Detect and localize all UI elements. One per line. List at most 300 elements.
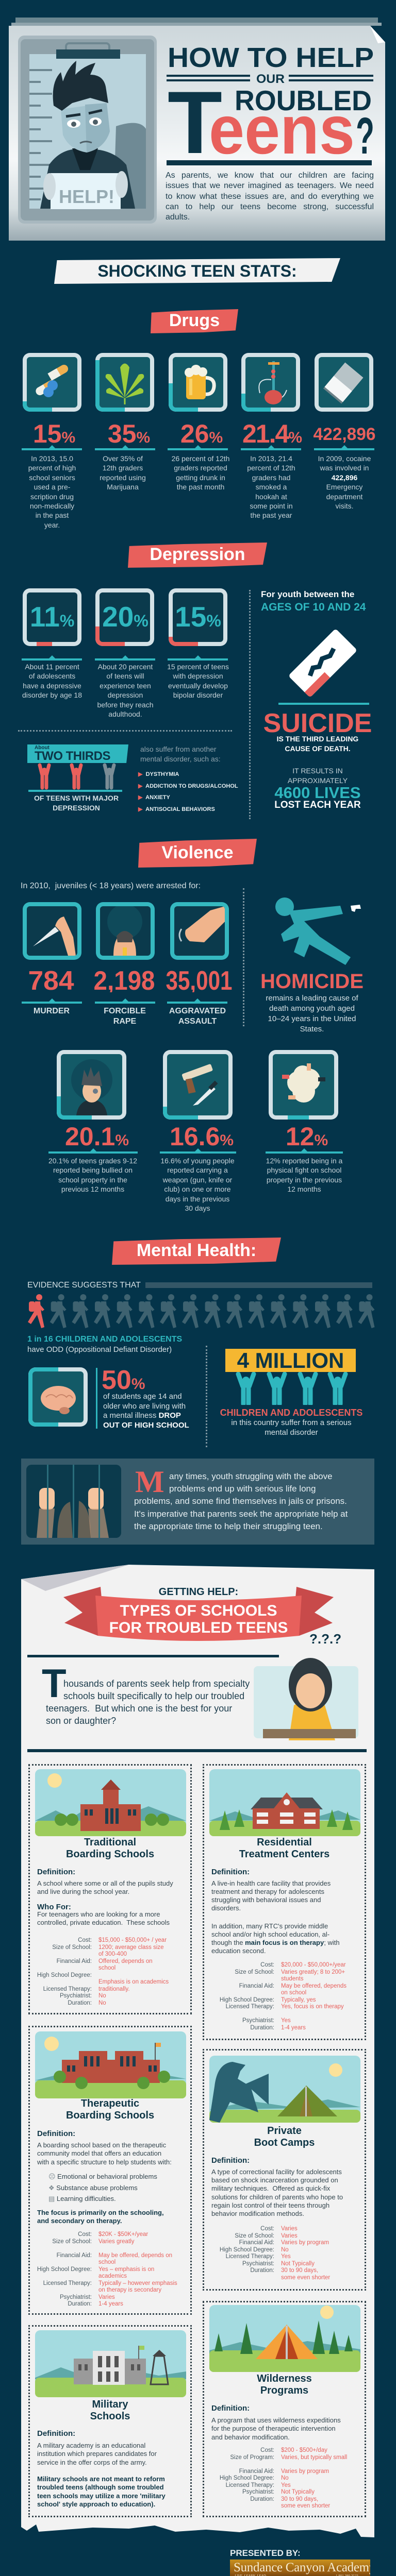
depression descriptions: About 20 percent (98, 663, 153, 671)
title: eens (209, 92, 355, 168)
card: therapeutic boarding schools: Psychiatrist: (60, 2294, 92, 2300)
depression underlines (22, 655, 228, 660)
panel: jail callout: any times, youth struggling with the above (169, 1471, 333, 1481)
illustration: boarding school (35, 1769, 186, 1836)
callout: suicide: IS THE THIRD LEADING (277, 735, 358, 743)
drug stat descriptions: 422,896 (332, 473, 357, 482)
intro paragraph: can to help our teens become strong, successful (166, 202, 374, 211)
card: traditional boarding schools: controlled, private education. These schools (37, 1919, 170, 1926)
heading: shocking teen stats (54, 258, 340, 284)
card: military schools: teen schools may utilize a more 'military (37, 2492, 166, 2500)
depression descriptions: experience teen (100, 682, 151, 690)
list: other disorders: ▶ DYSTHYMIA (138, 771, 179, 777)
card: residential treatment centers: Definition: (211, 1868, 250, 1876)
card: residential treatment centers: Yes, focus is on therapy (281, 2004, 344, 2010)
card: traditional boarding schools: and live during the school year. (37, 1888, 129, 1895)
mugshot illustration (18, 36, 157, 224)
drug stat descriptions: graders reported (174, 464, 227, 472)
card: traditional boarding schools: Traditional (84, 1837, 136, 1848)
card: residential treatment centers: treatment and therapy for adolescents (211, 1888, 324, 1895)
card: wilderness programs: Programs (260, 2385, 308, 2396)
card: therapeutic boarding schools: Size of School: (52, 2238, 92, 2244)
card: wilderness programs: A program that uses wilderness expeditions (211, 2416, 341, 2424)
card: wilderness programs: some even shorter (281, 2503, 330, 2509)
callout: suicide (261, 589, 372, 810)
card: traditional boarding schools: Financial Aid: (57, 1958, 92, 1964)
card: private boot camps: Varies by program (281, 2240, 329, 2246)
depression descriptions (22, 663, 229, 718)
school violence underlines and descriptions: 30 days (185, 1204, 210, 1212)
card: residential treatment centers: May be offered, depends (281, 1982, 346, 1989)
title: ROUBLED (235, 84, 372, 116)
list: other disorders: also suffer from another (140, 745, 217, 753)
icon box: beer (169, 353, 227, 412)
callout: suicide: 4600 LIVES (274, 784, 361, 802)
card: therapeutic boarding schools: The focus is primarily on the schooling, (37, 2209, 164, 2216)
drug stat descriptions: In 2009, cocaine (318, 454, 371, 463)
card: therapeutic boarding schools: community model that offers an education (37, 2149, 161, 2157)
card: private boot camps (203, 2049, 366, 2291)
card: private boot camps: Private (267, 2125, 302, 2137)
card: traditional boarding schools: of 300-400 (98, 1951, 127, 1957)
card: private boot camps: Cost: (260, 2226, 274, 2232)
card: therapeutic boarding schools: Therapeutic (81, 2098, 139, 2109)
text: intro thousands of parents: teenagers. But which one is the best for your (46, 1703, 232, 1714)
card: residential treatment centers: Treatment Centers (239, 1849, 329, 1860)
drug stat descriptions: school seniors (29, 473, 75, 482)
card: therapeutic boarding schools: academics (98, 2273, 127, 2279)
school violence underlines and descriptions: property in the previous (267, 1176, 342, 1184)
card: residential treatment centers: In addition, many RTC's provide middle (211, 1922, 328, 1930)
ribbon heading: types of schools: GETTING HELP: (159, 1586, 238, 1598)
card: traditional boarding schools: Who For: (37, 1903, 71, 1911)
card: traditional boarding schools: No (98, 1993, 106, 1999)
heading: evidence suggests (27, 1281, 372, 1290)
callout: suicide: AGES OF 10 AND 24 (261, 601, 366, 613)
callout: two thirds: About (35, 745, 50, 751)
drug stat descriptions: percent of high (28, 464, 76, 472)
drug stat descriptions: reported using (100, 473, 146, 482)
drug stat descriptions: percent of 12th (247, 464, 295, 472)
card: wilderness programs: Licensed Therapy: (226, 2482, 274, 2488)
drug stat descriptions: the past year (251, 511, 292, 519)
card: residential treatment centers: Size of School: (235, 1969, 274, 1975)
banner: depression (128, 543, 267, 568)
card: private boot camps: 30 to 90 days, (281, 2267, 318, 2274)
icon: four figures (236, 1372, 348, 1405)
callout: suicide: LOST EACH YEAR (274, 800, 361, 810)
card: wilderness programs: Definition: (211, 2404, 250, 2413)
drug stat descriptions: was involved in (320, 464, 369, 472)
card: private boot camps: High School Degree: (220, 2246, 274, 2252)
depression stat boxes: 11% (30, 601, 74, 633)
card: traditional boarding schools: Boarding Schools (66, 1849, 154, 1860)
dotted divider violence (243, 888, 244, 1026)
card: therapeutic boarding schools: Cost: (78, 2231, 92, 2238)
banner: violence (138, 839, 257, 868)
heading: evidence suggests: EVIDENCE SUGGESTS THAT (27, 1281, 141, 1290)
school violence underlines and descriptions: physical fight on school (267, 1166, 341, 1174)
card: therapeutic boarding schools: ❖ Substance abuse problems (48, 2183, 138, 2192)
card: wilderness programs: 30 to 90 days, (281, 2496, 318, 2502)
drug stat descriptions: smoked a (256, 483, 287, 491)
drug stat descriptions: In 2013, 21.4 (250, 454, 292, 463)
stat: 4 million: CHILDREN AND ADOLESCENTS (220, 1408, 362, 1418)
list: other disorders: mental disorder, such as: (140, 754, 221, 762)
drug stat numbers: 21.4% (242, 419, 302, 448)
title: ? (356, 107, 374, 165)
card: residential treatment centers: Varies greatly; 8 to 200+ (281, 1969, 345, 1975)
intro paragraph (166, 171, 374, 222)
card: military schools: institution which prepares candidates for (37, 2450, 157, 2458)
card: traditional boarding schools: For teenagers who are looking for a more (37, 1910, 160, 1918)
stat: 50% dropout: older who are living with (103, 1401, 186, 1411)
school violence underlines and descriptions: 16.6% of young people (160, 1157, 235, 1165)
card: therapeutic boarding schools: Varies (98, 2294, 115, 2300)
school violence underlines and descriptions: reported being bullied on (53, 1166, 133, 1174)
card: traditional boarding schools: Cost: (78, 1937, 92, 1943)
drug stat descriptions: 12th graders (103, 464, 143, 472)
school violence underlines and descriptions: 12 months (287, 1185, 321, 1193)
banner: mental health: Mental Health: (137, 1241, 256, 1260)
card: wilderness programs: Wilderness (257, 2373, 312, 2384)
card: military schools: Definition: (37, 2429, 75, 2438)
card: military schools: school' style approach to education). (37, 2500, 155, 2508)
panel: jail callout: M (135, 1465, 164, 1499)
violence underlines and labels: RAPE (113, 1017, 136, 1026)
card: therapeutic boarding schools: on therapy is secondary (98, 2287, 161, 2293)
callout: homicide: 10–24 years in the United (268, 1014, 356, 1023)
depression descriptions: of adolescents (29, 672, 75, 680)
panel: types of schools paper (21, 1565, 374, 2537)
stat: 50% dropout: a mental illness DROP (103, 1411, 181, 1420)
card: therapeutic boarding schools: Licensed Therapy: (43, 2280, 92, 2286)
card: therapeutic boarding schools: 1-4 years (98, 2301, 123, 2307)
callout: suicide: CAUSE OF DEATH. (285, 744, 351, 753)
school violence underlines and descriptions: weapon (gun, knife or (163, 1176, 232, 1184)
icon: hands on bars (26, 1465, 121, 1538)
list: other disorders: ▶ ANTISOCIAL BEHAVIORS (138, 806, 215, 812)
card: residential treatment centers: school and/or high school education, al- (211, 1930, 329, 1938)
callout: suicide: For youth between the (261, 589, 354, 599)
school violence underlines and descriptions: days in the previous (166, 1195, 229, 1203)
school violence underlines and descriptions: school property in the (58, 1176, 127, 1184)
card: residential treatment centers: education second. (211, 1947, 266, 1955)
drug stat descriptions: in the past (36, 511, 69, 519)
card: traditional boarding schools: school (98, 1965, 116, 1971)
text: ODD stat (27, 1335, 182, 1354)
school violence underlines and descriptions: club) on one or more (164, 1185, 231, 1193)
banner: violence: Violence (161, 843, 234, 862)
card: residential treatment centers: students (281, 1976, 303, 1982)
callout: two thirds (27, 744, 128, 812)
card: traditional boarding schools: Definition: (37, 1868, 75, 1876)
text: intro thousands of parents: schools built specifically to help our troubled (63, 1691, 244, 1701)
drug stat descriptions: hookah at (255, 493, 287, 501)
card: residential treatment centers: Yes (281, 2018, 291, 2024)
intro paragraph: to know what these issues are, and do everything we (166, 192, 374, 201)
mugshot illustration: HELP! (59, 186, 114, 207)
presented by logo: PRESENTED BY: (230, 2548, 301, 2558)
card: therapeutic boarding schools: Duration: (68, 2301, 92, 2307)
card: therapeutic boarding schools (28, 2026, 192, 2315)
card: traditional boarding schools: Size of School: (52, 1944, 92, 1951)
drug stat descriptions: getting drunk in (176, 473, 225, 482)
card: private boot camps: Varies (281, 2226, 298, 2232)
card: therapeutic boarding schools: school (98, 2259, 116, 2265)
card: military schools: Military (92, 2399, 128, 2410)
depression descriptions: disorder by age 18 (22, 691, 82, 699)
card: private boot camps: military techniques. Offered as quick-fix (211, 2184, 330, 2192)
card: private boot camps: Financial Aid: (239, 2240, 274, 2246)
depression stat boxes: 15% (175, 601, 221, 633)
card: residential treatment centers: Typically, yes (281, 1997, 316, 2003)
card: wilderness programs: for the purpose of therapeutic intervention (211, 2425, 336, 2432)
violence numbers (28, 966, 232, 992)
illustration: treatment center (209, 1769, 360, 1836)
drug stat descriptions: scription drug (30, 493, 74, 501)
drug stat descriptions: In 2013, 15.0 (31, 454, 73, 463)
depression descriptions: of teens will (106, 672, 144, 680)
panel: jail callout: It's imperative that parents seek the appropriate help at (134, 1509, 348, 1519)
drug stat numbers: 422,896 (314, 425, 375, 444)
school violence underlines and descriptions: reported carrying a (167, 1166, 228, 1174)
banner: depression: Depression (150, 545, 245, 564)
card: military schools: Schools (90, 2411, 130, 2422)
chart: 1 in 16 walking figures (28, 1294, 374, 1328)
card: traditional boarding schools: Psychiatrist: (60, 1993, 92, 1999)
school violence underlines and descriptions: 12% reported being in a (266, 1157, 342, 1165)
card: wilderness programs: Psychiatrist: (242, 2489, 274, 2495)
card: residential treatment centers: on school (281, 1990, 306, 1996)
icon: razor blade (278, 630, 369, 705)
panel: jail callout: problems, and some find themselves in jails or prisons. (134, 1496, 347, 1506)
title: OUR (256, 72, 285, 86)
panel: jail callout: the appropriate time to help their struggling teen. (134, 1521, 323, 1531)
card: traditional boarding schools: Offered, depends on (98, 1958, 153, 1964)
card: traditional boarding schools: $15,000 - $50,000+ / year (98, 1937, 167, 1943)
list: other disorders: ▶ ANXIETY (138, 794, 170, 801)
depression descriptions: bipolar disorder (173, 691, 223, 699)
callout: suicide: IT RESULTS IN (292, 767, 343, 775)
card: residential treatment centers (203, 1764, 366, 2040)
card: traditional boarding schools (28, 1764, 192, 2014)
drug stat numbers: 35% (108, 419, 150, 448)
card: military schools: service in the offer corps of the army. (37, 2459, 147, 2466)
divider line (27, 1749, 367, 1752)
depression descriptions: adulthood. (108, 710, 142, 718)
text: ODD stat: have ODD (Oppositional Defiant Disorder) (27, 1345, 172, 1354)
card: private boot camps: regain lost control of their teens through (211, 2201, 329, 2209)
card: residential treatment centers: High School Degree: (220, 1997, 274, 2003)
illustration: worried mother (254, 1631, 358, 1740)
card: private boot camps: Not Typically (281, 2261, 315, 2267)
header paper panel (9, 18, 385, 241)
card: wilderness programs: No (281, 2475, 289, 2481)
drug stat descriptions: some point in (250, 502, 293, 510)
card: traditional boarding schools: Licensed Therapy: (43, 1986, 92, 1992)
violence underlines and labels: FORCIBLE (104, 1007, 146, 1015)
callout: two thirds: TWO THIRDS (35, 749, 110, 763)
school violence underlines and descriptions: 20.1% of teens grades 9-12 (48, 1157, 137, 1165)
icon: three figures (38, 764, 116, 789)
ribbon heading: types of schools (63, 1586, 334, 1641)
card: private boot camps: Duration: (250, 2267, 274, 2274)
stat: 50% dropout: 50% (102, 1365, 145, 1395)
card: private boot camps: behavior modification methods. (211, 2210, 304, 2217)
drug stat descriptions: visits. (335, 502, 354, 510)
card: military schools: troubled teens (although some troubled (37, 2483, 164, 2491)
card: traditional boarding schools: 1200; average class size (98, 1944, 164, 1951)
card: therapeutic boarding schools: ▤ Learning difficulties. (48, 2195, 116, 2202)
card: therapeutic boarding schools: Definition: (37, 2129, 75, 2138)
card: wilderness programs: Yes (281, 2482, 291, 2488)
violence underlines and labels: AGGRAVATED (169, 1007, 226, 1015)
drug stat descriptions: Marijuana (107, 483, 139, 491)
stat: 50% dropout: of students age 14 and (103, 1392, 182, 1401)
card: therapeutic boarding schools: Financial Aid: (57, 2252, 92, 2259)
panel: jail callout (21, 1459, 374, 1545)
card: wilderness programs: Cost: (260, 2447, 274, 2453)
card: private boot camps: No (281, 2246, 289, 2252)
banner: mental health (112, 1238, 281, 1265)
card: private boot camps: Boot Camps (254, 2137, 315, 2148)
card: residential treatment centers: A live-in health care facility that provides (211, 1879, 331, 1887)
depression descriptions: have a depressive (23, 682, 81, 690)
title (167, 42, 374, 172)
card: wilderness programs: Duration: (250, 2496, 274, 2502)
card: private boot camps: Varies (281, 2233, 298, 2239)
text: arrests intro: In 2010, juveniles (< 18 years) were arrested for: (21, 882, 201, 890)
card: residential treatment centers: struggling with behavioral issues and (211, 1896, 321, 1904)
violence underlines and labels: MURDER (34, 1007, 70, 1015)
card: private boot camps: Definition: (211, 2156, 250, 2165)
intro paragraph: adults. (166, 213, 190, 222)
card: residential treatment centers: Cost: (260, 1962, 274, 1968)
callout: homicide (260, 897, 364, 1033)
card: traditional boarding schools: High School Degree: (37, 1972, 92, 1978)
card: military schools: Military schools are not meant to reform (37, 2475, 165, 2483)
violence underlines and labels (22, 998, 227, 1026)
icon box: marijuana (95, 353, 154, 412)
depression descriptions: eventually develop (168, 682, 228, 690)
card: wilderness programs: Varies by program (281, 2468, 329, 2474)
depression descriptions: before they reach (97, 701, 153, 709)
card: private boot camps: based on shock incarceration grounded on (211, 2176, 338, 2184)
list: other disorders (138, 745, 238, 812)
stat: 4 million (220, 1348, 362, 1437)
card: military schools (28, 2325, 192, 2517)
card: residential treatment centers: though the main focus is on therapy; with (211, 1939, 340, 1946)
drug stat descriptions: year. (44, 521, 60, 529)
depression descriptions: 15 percent of teens (167, 663, 229, 671)
card: military schools: A military academy is an educational (37, 2442, 145, 2449)
ribbon heading: types of schools: TYPES OF SCHOOLS (120, 1602, 277, 1619)
illustration: boot camp (209, 2056, 360, 2123)
card: therapeutic boarding schools: $20K - $50K+/year (98, 2231, 148, 2238)
drug stat descriptions: 26 percent of 12th (172, 454, 229, 463)
drug stat numbers: 15% (33, 419, 75, 448)
card: wilderness programs: Size of Program: (230, 2454, 274, 2461)
card: therapeutic boarding schools: Typically – however emphasis (98, 2280, 177, 2286)
icon box: pills (23, 353, 81, 412)
card: private boot camps: Psychiatrist: (242, 2261, 274, 2267)
callout: homicide: States. (300, 1025, 324, 1033)
school violence underlines and descriptions (48, 1148, 343, 1212)
callout: suicide: APPROXIMATELY (288, 776, 348, 785)
card: therapeutic boarding schools: A boarding school based on the therapeutic (37, 2141, 166, 2149)
drug stat descriptions: Over 35% of (103, 454, 143, 463)
drug stat descriptions: used a pre- (34, 483, 70, 491)
callout: two thirds: OF TEENS WITH MAJOR (34, 794, 119, 802)
stat: 50% dropout (28, 1365, 189, 1429)
card: therapeutic boarding schools: Varies greatly (98, 2238, 134, 2244)
drug stat descriptions: the past month (177, 483, 224, 491)
title: HOW TO HELP (168, 42, 374, 73)
card: therapeutic boarding schools: ☹ Emotional or behavioral problems (48, 2173, 157, 2180)
callout: two thirds: DEPRESSION (53, 804, 100, 812)
illustration: worried mother: ?.?.? (309, 1631, 341, 1647)
card: private boot camps: Yes (281, 2253, 291, 2260)
list: other disorders: ▶ ADDICTION TO DRUGS/ALCOHOL (138, 783, 238, 789)
depression stat boxes (23, 588, 227, 646)
card: wilderness programs: High School Degree: (220, 2475, 274, 2481)
stat: 4 million: mental disorder (265, 1428, 318, 1437)
card: wilderness programs (203, 2301, 366, 2517)
card: therapeutic boarding schools: May be offered, depends on (98, 2252, 172, 2259)
card: wilderness programs: $200 - $500+/day (281, 2447, 327, 2453)
card: therapeutic boarding schools: and secondary on therapy. (37, 2217, 122, 2225)
card: residential treatment centers: disorders. (211, 1904, 241, 1912)
drug stat descriptions: department (326, 493, 362, 501)
depression descriptions: About 11 percent (25, 663, 79, 671)
card: therapeutic boarding schools: with a specific structure to help students with: (37, 2158, 172, 2166)
depression descriptions: depression (108, 691, 143, 699)
card: traditional boarding schools: A school where some or all of the pupils study (37, 1879, 173, 1887)
drug stat descriptions (28, 454, 371, 529)
card: wilderness programs: Not Typically (281, 2489, 315, 2495)
card: private boot camps: some even shorter (281, 2274, 330, 2280)
callout: homicide: remains a leading cause of (266, 994, 358, 1003)
card: residential treatment centers: Financial Aid: (239, 1982, 274, 1989)
icon box: hookah (241, 353, 300, 412)
banner: drugs: Drugs (169, 311, 220, 330)
stat: 4 million: 4 MILLION (237, 1348, 344, 1372)
title: T (168, 73, 222, 172)
intro paragraph: As parents, we know that our children are facing (166, 171, 374, 180)
presented by logo (230, 2548, 370, 2576)
school violence numbers (65, 1123, 328, 1149)
card: residential treatment centers: Duration: (250, 2025, 274, 2031)
stat: 50% dropout: OUT OF HIGH SCHOOL (103, 1421, 189, 1429)
card: wilderness programs: Financial Aid: (239, 2468, 274, 2474)
violence underlines and labels: ASSAULT (178, 1017, 217, 1026)
drug stat descriptions: non-medically (30, 502, 74, 510)
text: intro thousands of parents (27, 1655, 279, 1726)
card: therapeutic boarding schools: Yes – emphasis is on (98, 2266, 154, 2272)
text: intro thousands of parents: son or daughter? (46, 1716, 116, 1726)
stat: 4 million: in this country suffer from a serious (231, 1418, 352, 1427)
card: residential treatment centers: 1-4 years (281, 2025, 306, 2031)
drug stat descriptions: Emergency (326, 483, 362, 491)
drug underlines (22, 445, 374, 450)
card: therapeutic boarding schools: High School Degree: (37, 2266, 92, 2272)
depression stat boxes: 20% (102, 601, 148, 633)
illustration: wilderness (209, 2305, 360, 2372)
card: private boot camps: solutions for children of parents who hope to (211, 2193, 343, 2201)
icon box: cocaine bag (315, 353, 373, 412)
card: residential treatment centers: Residential (257, 1837, 312, 1848)
